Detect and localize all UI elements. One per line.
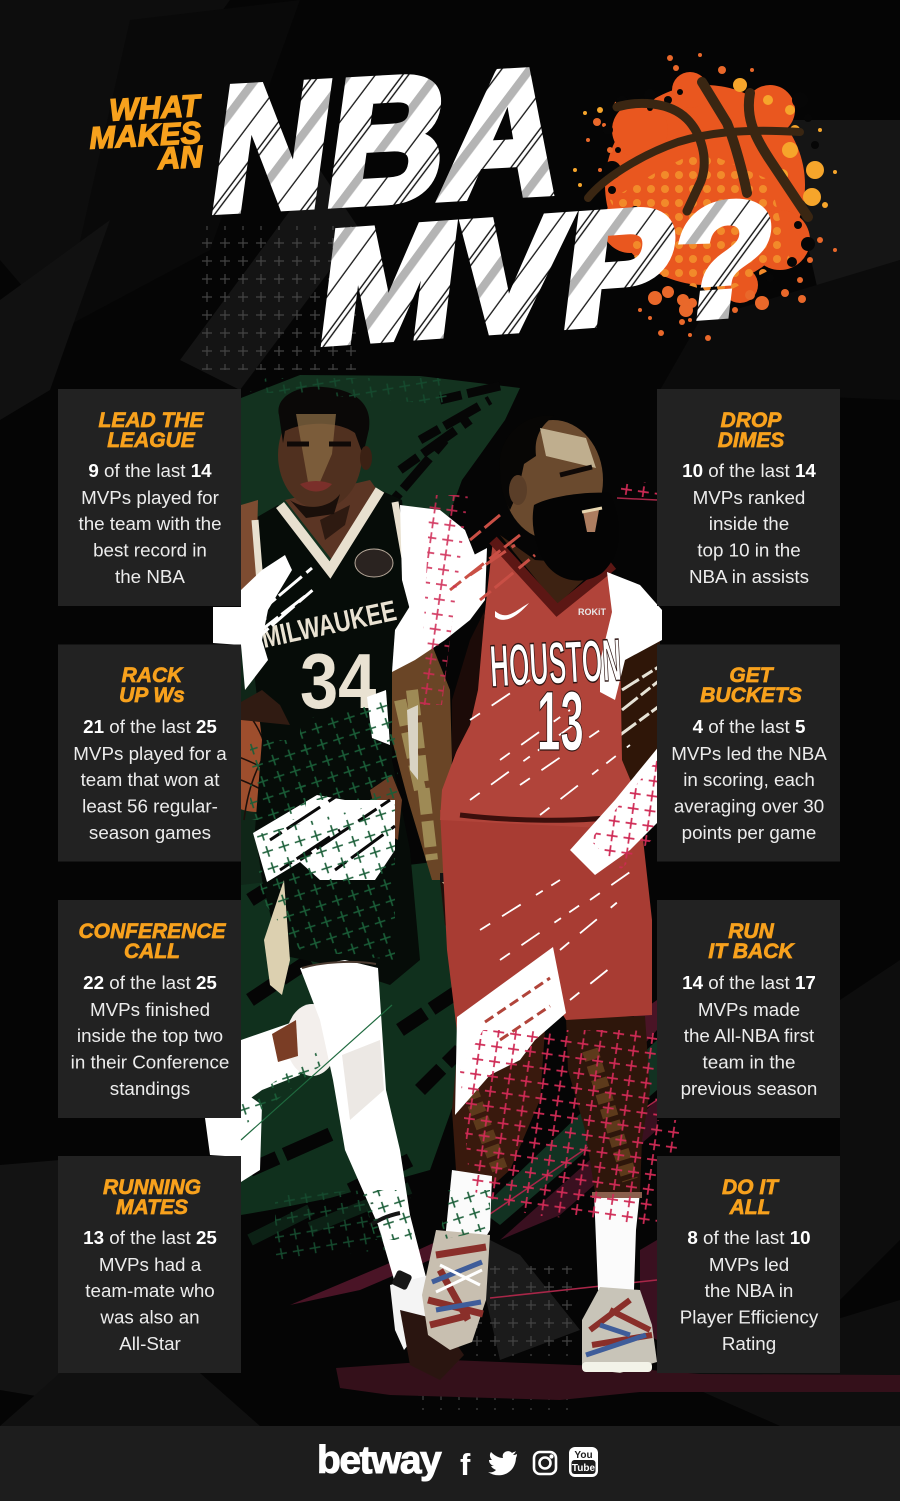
title: what makes an — [87, 88, 206, 180]
jersey number 13: 13 — [537, 675, 584, 769]
collar — [493, 540, 613, 610]
halftone dots — [610, 150, 790, 295]
panel: Run It Back: IT BACK — [708, 940, 795, 963]
collar — [280, 490, 380, 570]
crimson plus marks — [420, 482, 681, 1225]
panel: Run It Back — [657, 900, 840, 1118]
panel: Rack up Ws: RACK — [122, 664, 184, 687]
panel: Running Mates — [58, 1156, 241, 1373]
panel: Get Buckets: in scoring, each — [683, 769, 815, 790]
panel: Lead the League — [58, 389, 241, 606]
panel: Do It All: Player Efficiency — [680, 1306, 819, 1328]
panel: Run It Back: RUN — [728, 920, 775, 943]
panel: Conference Call: CONFERENCE — [78, 920, 226, 943]
title: NBA: NBA — [201, 31, 576, 249]
panel: Do It All: 8 of the last 10 — [687, 1227, 811, 1248]
jersey logo — [355, 549, 393, 577]
icon: basketball with paint splatter — [573, 53, 837, 341]
splatter core — [602, 72, 810, 303]
panel: Drop Dimes: 10 of the last 14 — [682, 460, 816, 481]
panel: Rack up Ws: 21 of the last 25 — [83, 716, 217, 737]
black splatter bites — [603, 89, 819, 282]
panel: Drop Dimes: MVPs ranked — [693, 487, 805, 508]
white brush strokes — [392, 505, 662, 1115]
shorts — [440, 810, 652, 1040]
legs — [445, 1016, 650, 1290]
plus grid: lower — [470, 1266, 578, 1356]
panel: Conference Call: standings — [110, 1078, 190, 1099]
icon: youtube — [569, 1447, 598, 1477]
arm and skin — [241, 500, 258, 590]
panel: Run It Back: 14 of the last 17 — [682, 972, 816, 993]
panel: Drop Dimes: DIMES — [718, 429, 784, 452]
panel: Drop Dimes: top 10 in the — [697, 540, 801, 560]
jersey swoosh — [495, 603, 529, 620]
icon: youtube: You — [574, 1450, 593, 1461]
panel: Get Buckets — [657, 644, 840, 862]
panel: Conference Call: in their Conference — [71, 1052, 229, 1072]
orange droplets — [586, 53, 837, 341]
icon: twitter — [488, 1451, 517, 1475]
icon: youtube: Tube — [572, 1463, 596, 1474]
far hand — [264, 880, 290, 995]
panel: Conference Call: CALL — [124, 940, 180, 963]
panel: Conference Call: MVPs finished — [90, 999, 210, 1020]
panel: Lead the League: the team with the — [78, 513, 222, 534]
panel: Drop Dimes: DROP — [721, 409, 782, 432]
white brush strokes — [213, 555, 395, 882]
panel: Rack up Ws: MVPs played for a — [73, 743, 227, 764]
jersey side trim — [255, 502, 411, 620]
panel: Get Buckets: BUCKETS — [700, 684, 802, 707]
jersey body and shorts — [252, 490, 420, 985]
head — [278, 387, 372, 518]
panel: Rack up Ws: team that won at — [81, 769, 220, 790]
neck — [500, 535, 600, 605]
player: Giannis — [205, 387, 464, 1380]
title: MVP?: MVP? — [311, 167, 784, 377]
icon: facebook: f — [460, 1447, 471, 1482]
panel: Running Mates: 13 of the last 25 — [83, 1227, 217, 1248]
ball — [208, 714, 306, 822]
left arm — [392, 640, 497, 948]
ball seams — [588, 82, 808, 217]
panel: Conference Call: 22 of the last 25 — [83, 972, 217, 993]
panel: Running Mates: team-mate who — [85, 1280, 215, 1301]
panel: Running Mates: was also an — [99, 1306, 200, 1328]
panel: Run It Back: MVPs made — [698, 999, 800, 1020]
neck and chest — [285, 480, 380, 560]
panel: Rack up Ws: UP Ws — [119, 684, 185, 707]
plus grid: bottom — [416, 1392, 578, 1410]
green plus marks — [241, 378, 490, 1260]
panel: Rack up Ws: least 56 regular- — [82, 796, 218, 816]
panel: Get Buckets: GET — [729, 664, 775, 687]
panel: Run It Back: previous season — [681, 1078, 817, 1099]
plus grid: header — [196, 226, 358, 370]
panel: Lead the League: LEAD THE — [98, 409, 204, 432]
paint: green brush top — [241, 375, 520, 890]
panel: Rack up Ws: season games — [89, 822, 211, 843]
panel: Do It All: the NBA in — [705, 1280, 793, 1301]
footer bar — [0, 1426, 900, 1501]
title: what makes an: AN — [156, 139, 204, 176]
paint: maroon and green lower right — [290, 498, 657, 1340]
panel: Do It All — [657, 1156, 840, 1373]
panel: Running Mates: MATES — [116, 1196, 188, 1219]
panel: Lead the League: 9 of the last 14 — [88, 460, 212, 481]
panel: Get Buckets: averaging over 30 — [674, 796, 824, 816]
panel: Running Mates: RUNNING — [103, 1176, 201, 1199]
panel: Lead the League: MVPs played for — [81, 487, 219, 508]
panel: Run It Back: team in the — [703, 1052, 795, 1072]
panel: Get Buckets: 4 of the last 5 — [693, 716, 805, 737]
beard — [533, 493, 619, 581]
paint: green brush lower — [241, 780, 470, 1240]
jersey armhole shading — [452, 610, 485, 760]
yellow paint — [573, 78, 837, 284]
sponsor: ROKiT — [578, 607, 606, 617]
logo: betway: betway — [317, 1439, 442, 1482]
back leg and shoe — [205, 1004, 338, 1182]
panel: Drop Dimes: NBA in assists — [689, 566, 809, 587]
panel: Running Mates: MVPs had a — [99, 1254, 202, 1275]
right arm — [615, 630, 660, 800]
panel: Rack up Ws — [58, 644, 241, 862]
panel: Get Buckets: MVPs led the NBA — [671, 743, 827, 764]
panel: Do It All: DO IT — [722, 1176, 780, 1199]
title: what makes an: WHAT — [108, 88, 204, 128]
jersey — [440, 540, 645, 830]
panel: Do It All: MVPs led — [709, 1254, 789, 1275]
panel: Do It All: Rating — [722, 1333, 776, 1354]
icon: instagram — [534, 1452, 556, 1474]
panel: Drop Dimes: inside the — [709, 513, 789, 534]
panel: Conference Call — [58, 900, 241, 1118]
title: what makes an: MAKES — [88, 115, 202, 156]
panel: Lead the League: LEAGUE — [107, 429, 196, 452]
jersey number 34: 34 — [300, 637, 376, 725]
panel: Lead the League: the NBA — [115, 566, 185, 587]
panel: Running Mates: All-Star — [119, 1333, 181, 1354]
front sleeve leg — [300, 960, 464, 1380]
player: Harden — [392, 416, 662, 1373]
jersey text: Houston: HOUSTON — [488, 626, 623, 700]
panel: Lead the League: best record in — [93, 540, 207, 560]
panel: Conference Call: inside the top two — [77, 1025, 223, 1046]
paint: maroon floor — [336, 1360, 900, 1400]
panel: Drop Dimes — [657, 389, 840, 606]
panel: Run It Back: the All-NBA first — [684, 1025, 815, 1046]
shoes — [422, 1230, 657, 1373]
panel: Do It All: ALL — [729, 1196, 770, 1219]
waistband shadow — [460, 815, 630, 820]
jersey text: Milwaukee: MILWAUKEE — [259, 595, 399, 655]
panel: Get Buckets: points per game — [682, 822, 816, 843]
head — [500, 416, 619, 581]
